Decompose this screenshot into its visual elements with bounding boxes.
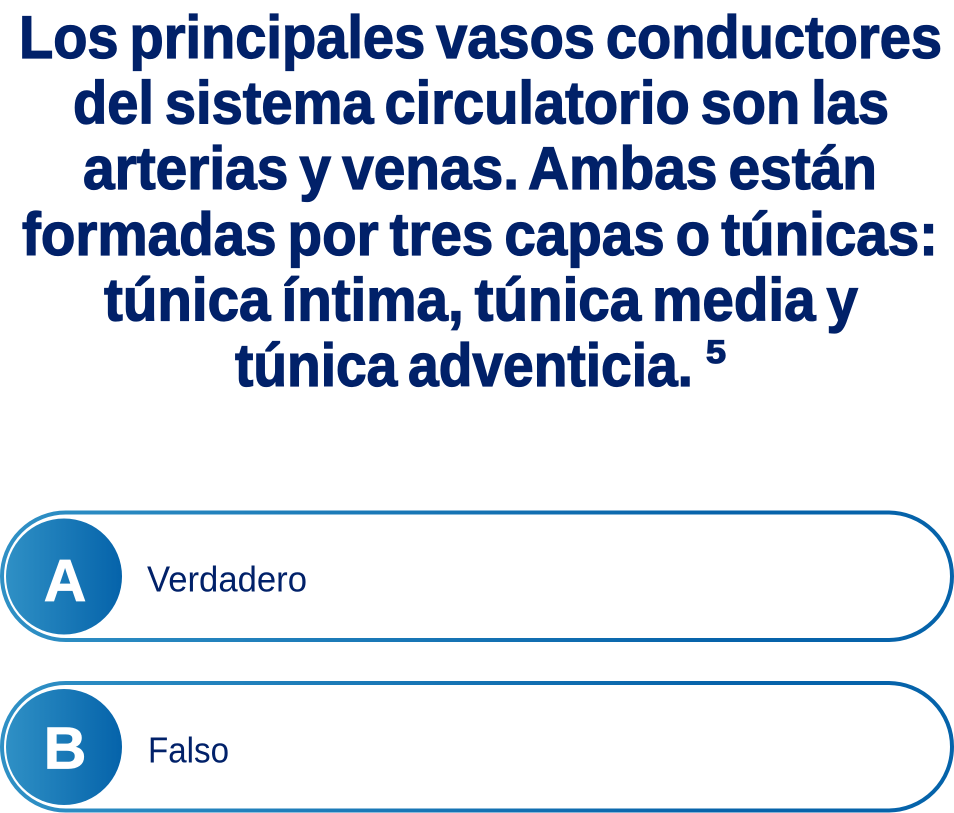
badge: letter B	[6, 689, 122, 805]
title: question statement: túnica íntima, túnica media y	[104, 266, 859, 334]
title: question statement	[19, 4, 942, 399]
option label: Falso: Falso	[148, 730, 229, 770]
title: question statement: del sistema circulatorio son las	[73, 70, 889, 136]
answer option A: Verdadero	[2, 512, 952, 640]
badge: letter A: A	[44, 548, 86, 614]
badge: letter A	[6, 518, 122, 634]
answer option B: Falso	[2, 683, 952, 810]
title: question statement: 5	[706, 334, 726, 370]
title: question statement: arterias y venas. Ambas están	[83, 135, 877, 202]
option label: Verdadero: Verdadero	[147, 558, 307, 600]
title: question statement: túnica adventicia.	[235, 332, 693, 399]
badge: letter B: B	[44, 716, 86, 782]
